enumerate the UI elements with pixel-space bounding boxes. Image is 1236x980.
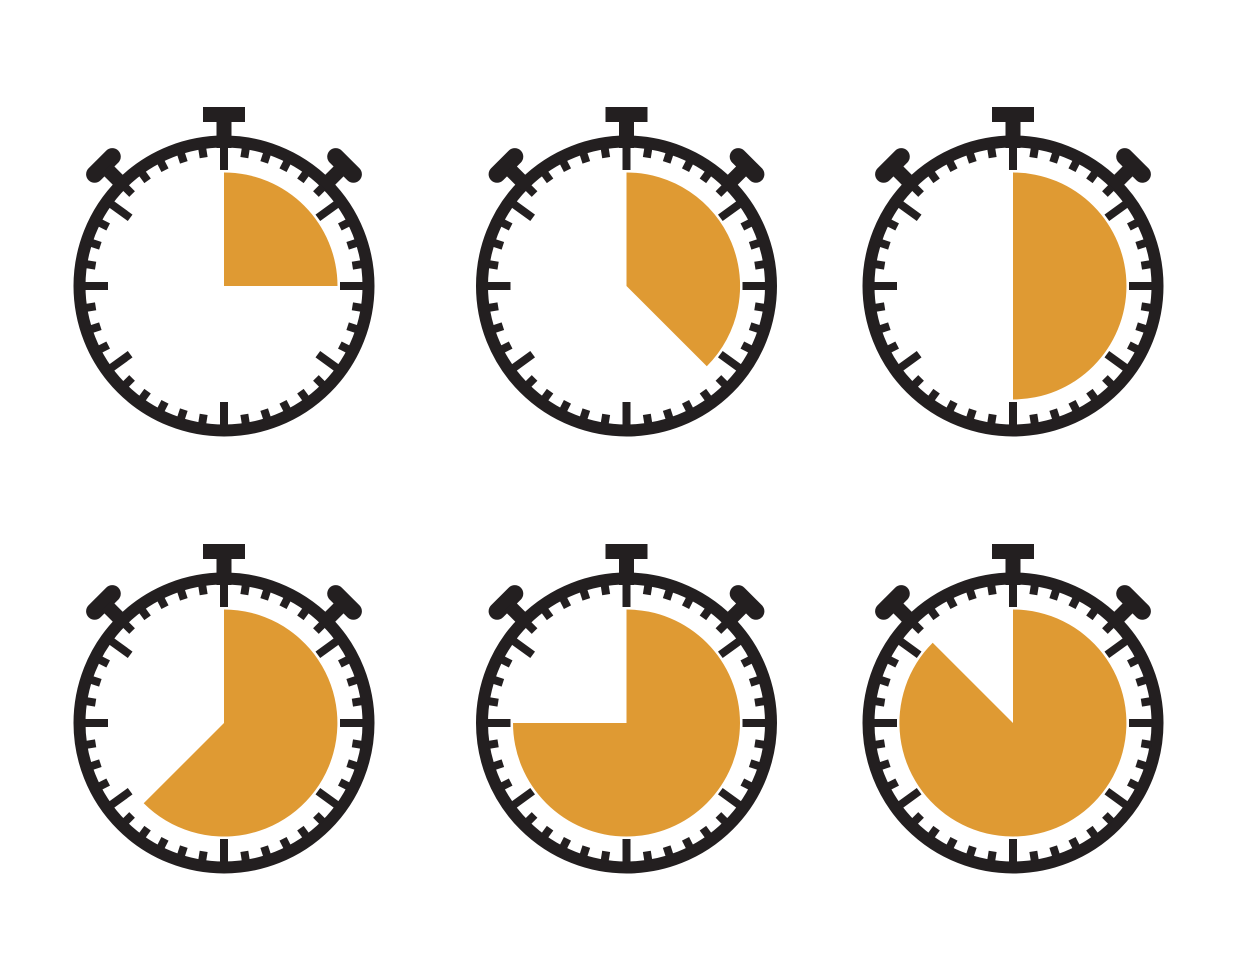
wedge: 315 degrees (899, 610, 1126, 836)
watch body and ticks (482, 107, 771, 430)
wedge: 90 degrees (224, 172, 338, 286)
wedge: 225 degrees (144, 610, 337, 836)
watch body and ticks (482, 544, 771, 868)
stopwatch: 225 degrees elapsed (80, 544, 368, 868)
stopwatch: three quarters elapsed (482, 544, 771, 868)
wedge: 135 degrees (626, 172, 740, 366)
stopwatch: 135 degrees elapsed (482, 107, 771, 430)
stopwatch: quarter elapsed (80, 107, 368, 430)
wedge: 180 degrees (1013, 172, 1126, 400)
watch body and ticks (80, 107, 368, 430)
wedge: 270 degrees (513, 610, 740, 836)
watch body and ticks (80, 544, 368, 868)
stopwatch: half elapsed (868, 107, 1158, 430)
watch body and ticks (868, 107, 1158, 430)
watch body and ticks (868, 544, 1158, 868)
stopwatch: 315 degrees elapsed (868, 544, 1158, 868)
